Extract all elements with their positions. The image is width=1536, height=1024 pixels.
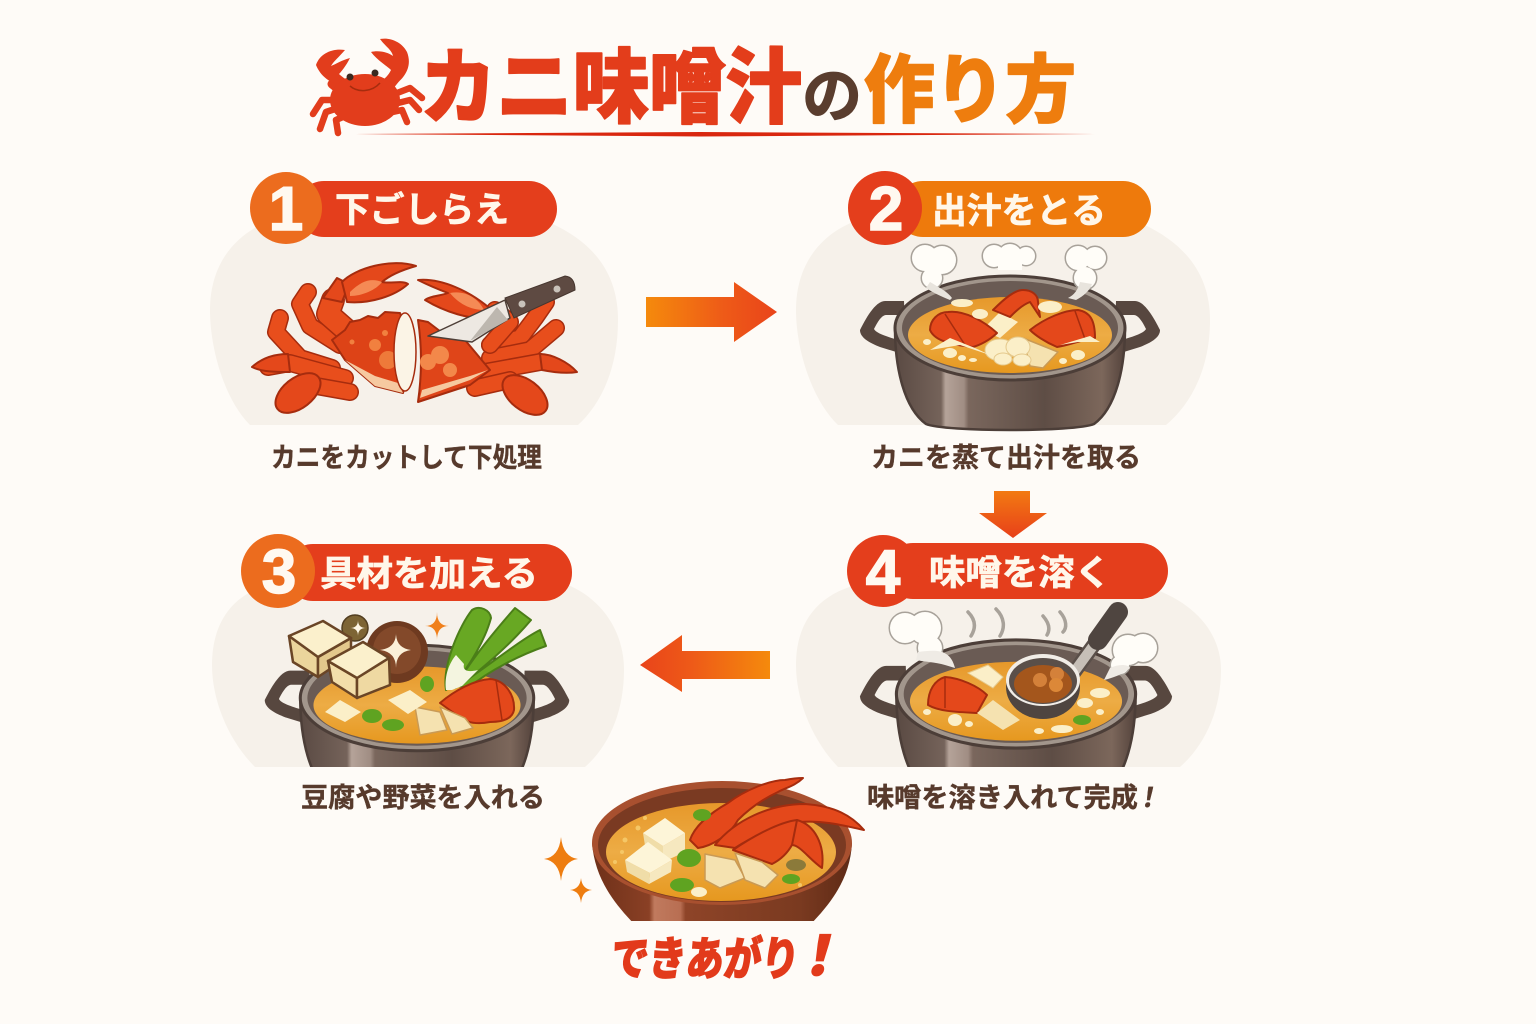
illustration: cut crab and knife [252,263,577,423]
ladle [1006,612,1118,719]
panel: step 2 [796,171,1210,430]
arrow: step 1 to step 2 [646,282,777,342]
steam clouds [912,244,1106,300]
crab meat and tofu [1023,338,1058,368]
header pill 2 [895,181,1151,237]
title crab icon [313,39,422,133]
heading 4: 味噌を溶く [929,554,1111,593]
illustration: pot with steam [860,244,1160,430]
heading 2: 出汁をとる [932,192,1106,231]
number badge 4: 4 [866,538,901,607]
infographic canvas [210,38,1221,980]
small mushroom [342,615,368,641]
panel: step 4 [796,535,1221,767]
number badge 4 [847,535,919,607]
tofu cubes [625,818,685,884]
bowl [592,781,852,930]
crab meat [705,853,778,888]
number badge 2: 2 [869,175,903,244]
steam clouds and squiggles [890,609,1157,680]
crab legs [690,778,864,868]
panel background 2 [796,215,1210,425]
header pill 4 [885,543,1168,599]
caption 4: ！ [1133,782,1165,813]
title: 作り方 [864,49,1076,132]
header pill 1 [296,181,557,237]
finished miso soup bowl [544,778,864,930]
greens [670,809,806,897]
number badge 1 [250,172,322,244]
tofu blocks [289,621,390,698]
panel background 3 [212,582,624,767]
heading 1: 下ごしらえ [335,191,509,230]
title [420,43,1076,134]
crab claws in soup [982,312,1018,338]
soup items [923,665,1110,734]
arrow: step 4 to step 3 [640,635,770,692]
title: カニ味噌汁 [420,43,802,134]
shiitake mushroom [366,621,428,683]
caption 4: 味噌を溶き入れて完成 [867,783,1138,813]
title: の [802,63,862,130]
illustration: pot with ladle of miso [860,602,1172,767]
caption 3: 豆腐や野菜を入れる [301,783,545,813]
finished label: ！ [787,927,854,987]
title underline [355,132,1095,136]
number badge 1: 1 [269,175,303,244]
panel background 1 [210,215,618,425]
sparkles [544,837,592,903]
panel: step 1 [210,172,618,425]
arrow: step 2 to step 4 [979,491,1047,538]
finished label: できあがり [608,933,802,985]
sparkle [425,612,449,640]
soup items [325,676,514,735]
illustration: pot with ingredients [264,606,570,767]
green onions [445,608,546,690]
number badge 3 [241,534,315,608]
caption 1: カニをカットして下処理 [271,443,542,473]
panel background 4 [796,582,1221,767]
panel: step 3 [212,534,624,767]
heading 3: 具材を加える [320,555,538,594]
number badge 2 [848,171,922,245]
caption 2: カニを蒸て出汁を取る [871,443,1141,473]
number badge 3: 3 [262,538,296,607]
header pill 3 [285,544,572,601]
